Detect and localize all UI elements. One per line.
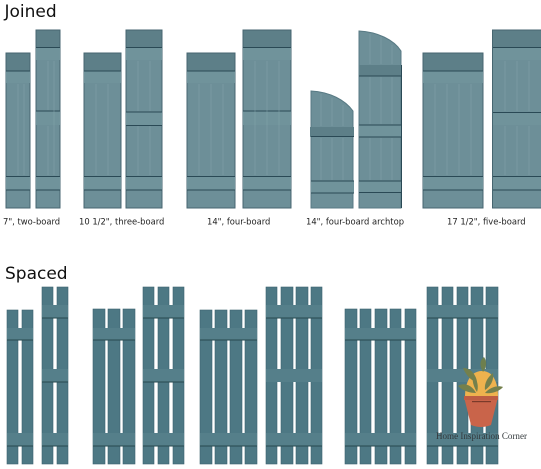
spaced shutter pair: three-board: [93, 287, 184, 464]
caption: 17 1/2 inch five-board: 17 1/2", five-board: [447, 216, 526, 226]
shutter pair: 14 inch four-board: [187, 30, 291, 208]
caption: 7 inch two-board: 7", two-board: [3, 216, 60, 226]
heading: Spaced: Spaced: [5, 264, 68, 284]
heading: Joined: Joined: [4, 2, 57, 22]
shutter pair: 17 1/2 inch five-board: [423, 30, 541, 208]
spaced shutter pair: four-board: [200, 287, 322, 464]
caption: 14 inch four-board archtop: 14", four-board archtop: [306, 216, 404, 226]
spaced shutter pair: two-board: [7, 287, 68, 464]
shutter pair: 10 1/2 inch three-board: [84, 30, 162, 208]
icon: potted plant logo: [458, 357, 503, 427]
spaced shutter: five-board tall: [427, 287, 498, 464]
watermark: Home Inspiration Corner: Home Inspiration Corner: [436, 432, 528, 442]
caption: 14 inch four-board: 14", four-board: [207, 216, 270, 226]
shutter pair: 14 inch four-board archtop: [310, 31, 402, 208]
shutter pair: 7 inch two-board: [6, 30, 60, 208]
spaced shutter: five-board short: [345, 309, 416, 464]
caption: 10 1/2 inch three-board: 10 1/2", three-board: [79, 216, 164, 226]
